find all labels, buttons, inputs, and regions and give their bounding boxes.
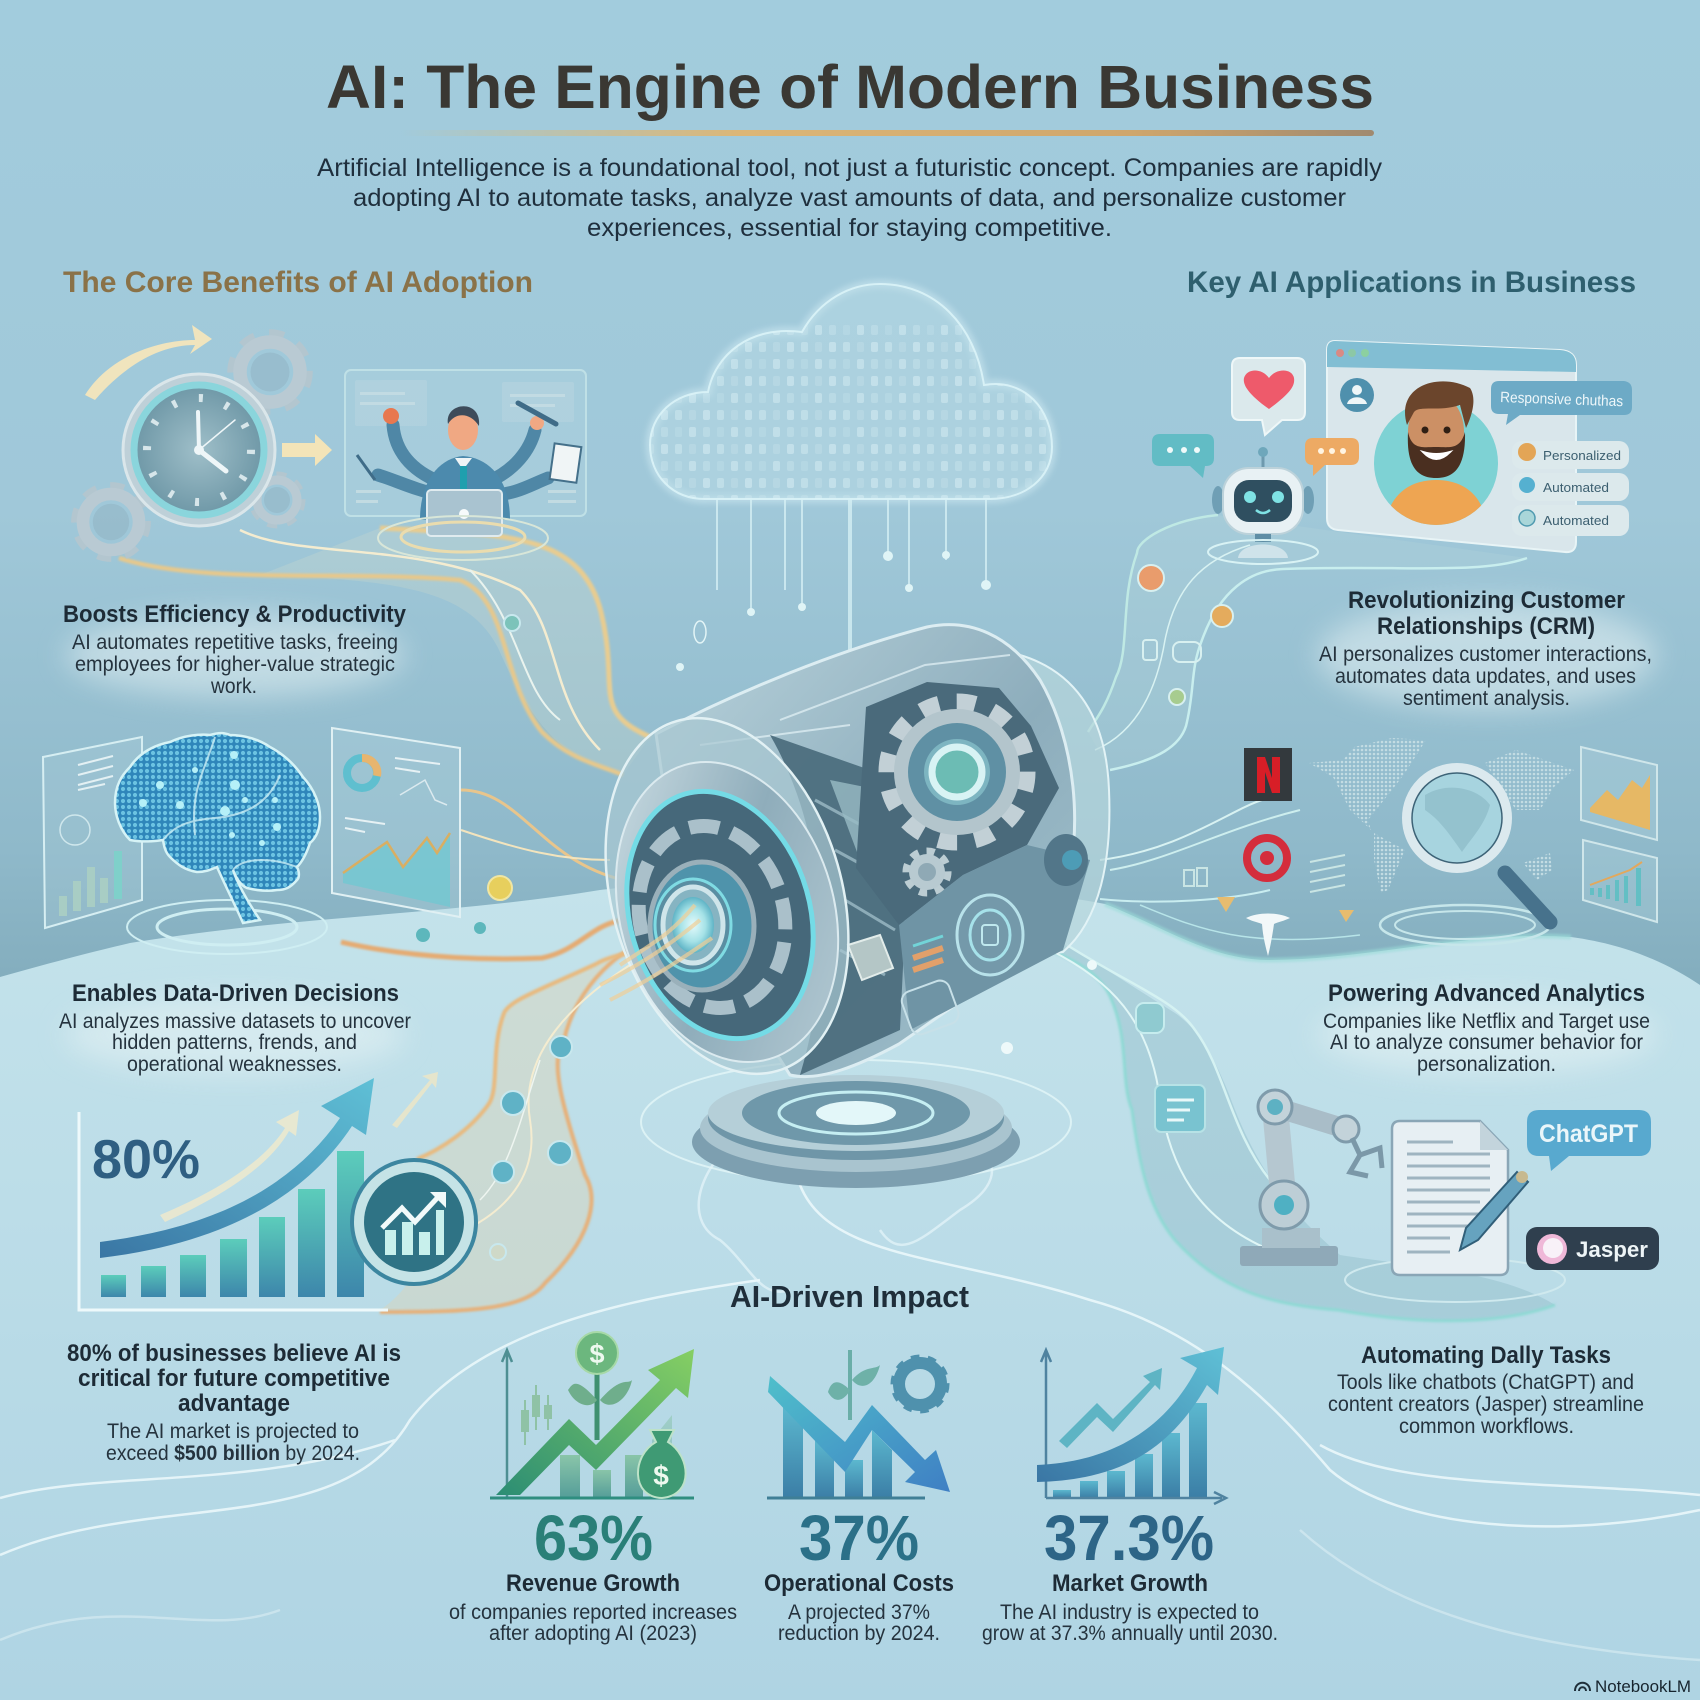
orange chat bubble bbox=[1305, 438, 1359, 476]
stat: 37.3 percent: grow at 37.3% annually until 2030. bbox=[982, 1622, 1278, 1645]
chart: revenue growth bbox=[490, 1332, 694, 1498]
icon: data brain bbox=[43, 728, 512, 954]
chart: market growth bbox=[1037, 1347, 1226, 1504]
bar chart: 80 percent: 80% bbox=[92, 1128, 200, 1190]
connector block bbox=[848, 935, 893, 980]
text: data-driven decisions: Enables Data-Driven Decisions bbox=[72, 980, 399, 1007]
stat: 63 percent: of companies reported increases bbox=[449, 1601, 737, 1624]
icon: world map bbox=[1309, 738, 1574, 893]
growth arrow bbox=[100, 1078, 374, 1258]
text: 80 percent stat: exceed $500 billion by 2024. bbox=[106, 1442, 360, 1465]
hands and tools bbox=[383, 408, 399, 424]
text: boosts efficiency: work. bbox=[210, 675, 257, 698]
small gear bbox=[907, 852, 947, 892]
text: boosts efficiency: Boosts Efficiency & Productivity bbox=[63, 601, 407, 628]
text: CRM bbox=[1319, 587, 1652, 710]
text: 80 percent stat: critical for future competitive bbox=[78, 1365, 390, 1392]
intro text: experiences, essential for staying competitive. bbox=[587, 214, 1112, 242]
orange status stripes bbox=[913, 936, 943, 970]
green zigzag arrow bbox=[496, 1349, 694, 1495]
user icon bbox=[1340, 378, 1374, 412]
analytics side panels bbox=[1581, 747, 1657, 922]
large gear bbox=[887, 702, 1027, 842]
axes bbox=[79, 1112, 388, 1310]
icon: multitasking employee bbox=[345, 370, 586, 560]
chart: revenue growth: $ bbox=[589, 1339, 605, 1369]
text: data-driven decisions: AI analyzes massive datasets to uncover bbox=[59, 1010, 411, 1033]
stat: 37 percent: reduction by 2024. bbox=[778, 1622, 940, 1645]
badge: Jasper bbox=[1526, 1227, 1659, 1270]
teal chat bubble bbox=[1152, 434, 1214, 478]
engine dark housing bbox=[856, 682, 1059, 925]
engine panel bbox=[830, 780, 900, 860]
stat: 37.3 percent: The AI industry is expected to bbox=[1000, 1601, 1259, 1624]
plant bbox=[848, 1350, 852, 1420]
pill: personalized: Personalized bbox=[1543, 448, 1621, 463]
background panel bbox=[345, 370, 586, 516]
text: 80 percent stat: The AI market is projected to bbox=[107, 1420, 359, 1443]
engine rear glass bulge bbox=[1000, 655, 1109, 960]
stat: 63 percent: after adopting AI (2023) bbox=[489, 1622, 697, 1645]
stat: 37.3 percent: 37.3% bbox=[1044, 1502, 1214, 1574]
text: boosts efficiency bbox=[63, 601, 407, 698]
logo: Tesla bbox=[1246, 914, 1290, 956]
text: daily tasks: Automating Dally Tasks bbox=[1361, 1342, 1611, 1369]
text: CRM: Revolutionizing Customer bbox=[1348, 587, 1625, 614]
heart bubble bbox=[1232, 358, 1305, 435]
intro text: Artificial Intelligence is a foundational tool, not just a futuristic concept. Companies are rapidly bbox=[317, 154, 1383, 182]
icon: right arrow bbox=[282, 434, 332, 466]
pill: automated one: Automated bbox=[1543, 480, 1609, 495]
left data panel bbox=[43, 737, 142, 928]
icon: clock with gears bbox=[77, 325, 332, 556]
gear bbox=[895, 1359, 945, 1409]
right port bbox=[1044, 834, 1088, 886]
engine cylinder body bbox=[656, 625, 1075, 1077]
icon: magnifying glass bbox=[1380, 768, 1550, 945]
candlestick marks bbox=[525, 1385, 548, 1445]
text: 80 percent stat bbox=[67, 1340, 401, 1465]
engine dark interior slats bbox=[770, 735, 905, 1075]
text: data-driven decisions: hidden patterns, frends, and bbox=[112, 1031, 357, 1054]
flow tokens left bbox=[490, 615, 572, 1260]
falling arrow bbox=[768, 1376, 950, 1492]
bar chart: 80 percent bbox=[79, 1072, 438, 1310]
head bbox=[448, 410, 478, 450]
badge: ChatGPT bbox=[1527, 1110, 1651, 1171]
customer avatar bbox=[1374, 401, 1498, 525]
text: data-driven decisions bbox=[59, 980, 411, 1076]
arms bbox=[378, 425, 548, 495]
pill: automated two bbox=[1512, 505, 1629, 536]
badge: Jasper: Jasper bbox=[1576, 1237, 1648, 1262]
chart: operational costs bbox=[767, 1350, 950, 1498]
text: daily tasks: common workflows. bbox=[1399, 1415, 1574, 1438]
text: CRM: AI personalizes customer interactions, bbox=[1319, 643, 1652, 666]
stat: 37 percent: 37% bbox=[799, 1502, 919, 1574]
text: boosts efficiency: employees for higher-value strategic bbox=[75, 653, 395, 676]
flow tokens lower right bbox=[1001, 960, 1205, 1132]
title: AI: The Engine of Modern Business bbox=[326, 53, 1374, 121]
faint rising arrow bbox=[160, 1110, 299, 1222]
logo: Netflix bbox=[1244, 748, 1292, 801]
engine top plate lines bbox=[700, 655, 1010, 745]
central AI engine bbox=[566, 625, 1109, 1103]
text: advanced analytics: personalization. bbox=[1417, 1053, 1556, 1076]
small analytics marks bbox=[1184, 855, 1354, 922]
rear round module bbox=[957, 895, 1023, 975]
decorative white flow lines bbox=[0, 1110, 1700, 1660]
stat: 63 percent: Revenue Growth bbox=[506, 1570, 680, 1597]
text: 80 percent stat: 80% of businesses believe AI is bbox=[67, 1340, 401, 1367]
brain folds and nodes bbox=[163, 737, 297, 870]
text: CRM: sentiment analysis. bbox=[1403, 687, 1570, 710]
heading: key applications: Key AI Applications in Business bbox=[1187, 266, 1636, 299]
text: daily tasks bbox=[1328, 1342, 1644, 1438]
icon: robot arm bbox=[1240, 1090, 1382, 1266]
flow tokens upper right bbox=[1138, 565, 1233, 705]
text: CRM: automates data updates, and uses bbox=[1335, 665, 1636, 688]
chart: revenue growth: $ bbox=[653, 1460, 669, 1491]
gold flow ribbons, left side bbox=[119, 528, 694, 1312]
intro text bbox=[317, 154, 1383, 242]
pill: personalized bbox=[1512, 441, 1629, 469]
text: advanced analytics: Companies like Netflix and Target use bbox=[1323, 1010, 1650, 1033]
teal flow ribbons, right side bbox=[1029, 515, 1571, 1321]
icon: chatbot robot bbox=[1152, 358, 1318, 564]
heading: core benefits: The Core Benefits of AI Adoption bbox=[63, 266, 533, 299]
stat: 37 percent: Operational Costs bbox=[764, 1570, 954, 1597]
text: advanced analytics: AI to analyze consumer behavior for bbox=[1330, 1031, 1643, 1054]
title underline bbox=[400, 130, 1374, 136]
text: daily tasks: Tools like chatbots (ChatGPT) and bbox=[1337, 1371, 1634, 1394]
engine front disk bbox=[566, 689, 888, 1103]
pill: automated two: Automated bbox=[1543, 513, 1609, 528]
stat: 63 percent bbox=[449, 1502, 737, 1645]
central cloud with binary data bbox=[650, 284, 1052, 671]
money bag bbox=[638, 1430, 686, 1498]
growth arrow bbox=[1037, 1347, 1224, 1482]
stat: 37.3 percent bbox=[982, 1502, 1278, 1645]
panel: CRM window: Responsive chuthas bbox=[1500, 389, 1623, 410]
text: boosts efficiency: AI automates repetitive tasks, freeing bbox=[72, 631, 398, 654]
lower light background area bbox=[0, 879, 1700, 1700]
panel: CRM window bbox=[1327, 341, 1632, 552]
stat: 37 percent: A projected 37% bbox=[788, 1601, 930, 1624]
lower keypad bbox=[899, 978, 961, 1037]
stat: 37 percent bbox=[764, 1502, 954, 1645]
icon: curved arrow bbox=[85, 325, 212, 400]
laptop bbox=[427, 490, 502, 536]
icon: document and pen bbox=[1345, 1121, 1565, 1302]
text: daily tasks: content creators (Jasper) streamline bbox=[1328, 1393, 1644, 1416]
stem and coin bbox=[594, 1370, 600, 1440]
robot bbox=[1262, 454, 1264, 470]
text: 80 percent stat: advantage bbox=[178, 1390, 290, 1417]
heading: AI-driven impact: AI-Driven Impact bbox=[730, 1279, 969, 1314]
engine lower console bbox=[899, 845, 1090, 1030]
badge: ChatGPT: ChatGPT bbox=[1539, 1120, 1638, 1148]
pedestal base bbox=[641, 1060, 1071, 1188]
small zigzag arrow bbox=[1059, 1368, 1162, 1448]
logo: Target bbox=[1247, 838, 1287, 878]
right chart panel bbox=[332, 728, 460, 917]
text: data-driven decisions: operational weaknesses. bbox=[127, 1053, 342, 1076]
responsive bubble bbox=[1491, 381, 1632, 425]
text: CRM: Relationships (CRM) bbox=[1377, 613, 1595, 640]
text: advanced analytics: Powering Advanced Analytics bbox=[1328, 980, 1645, 1007]
text: advanced analytics bbox=[1323, 980, 1650, 1076]
NotebookLM mark: NotebookLM bbox=[1595, 1677, 1691, 1696]
torso bbox=[420, 456, 510, 520]
soft label halos bbox=[65, 600, 1657, 1075]
floating platform bbox=[401, 522, 525, 552]
pill: automated one bbox=[1512, 473, 1629, 501]
stat: 63 percent: 63% bbox=[534, 1502, 653, 1574]
intro text: adopting AI to automate tasks, analyze vast amounts of data, and personalize customer bbox=[353, 184, 1346, 212]
brain shape bbox=[115, 733, 320, 923]
gold light entering core bbox=[600, 905, 712, 1000]
icon: growth badge bbox=[352, 1160, 476, 1284]
stat: 37.3 percent: Market Growth bbox=[1052, 1570, 1208, 1597]
